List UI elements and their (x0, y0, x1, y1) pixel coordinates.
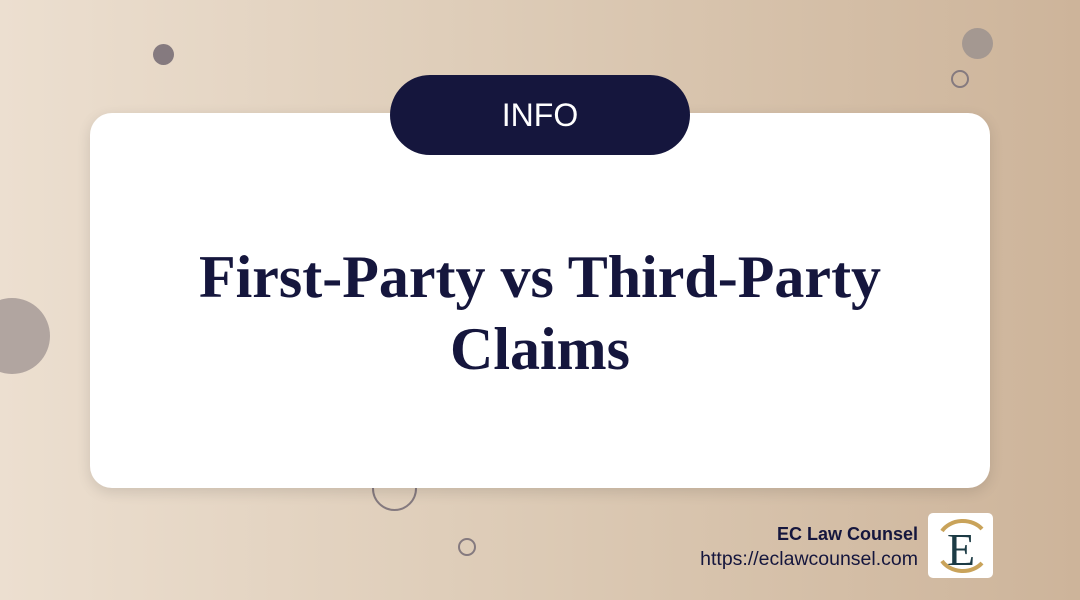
icon: logo (928, 513, 993, 578)
text block: brand (700, 524, 918, 570)
text block: brand: https://eclawcounsel.com (700, 548, 918, 570)
text block: brand: EC Law Counsel (777, 524, 918, 544)
panel: main card (90, 113, 990, 488)
decorative circle: left (0, 298, 50, 374)
decorative circle: top left (153, 44, 174, 65)
decorative circle: top right (962, 28, 993, 59)
icon: logo: E (947, 524, 975, 575)
decorative ring: top right (951, 70, 969, 88)
title: Claims (450, 316, 630, 382)
decorative ring: bottom small (458, 538, 476, 556)
title: First-Party vs Third-Party (199, 244, 881, 310)
decorative ring: bottom (372, 466, 417, 511)
badge: INFO (390, 75, 690, 155)
badge: INFO: INFO (502, 97, 578, 133)
title (199, 244, 881, 382)
